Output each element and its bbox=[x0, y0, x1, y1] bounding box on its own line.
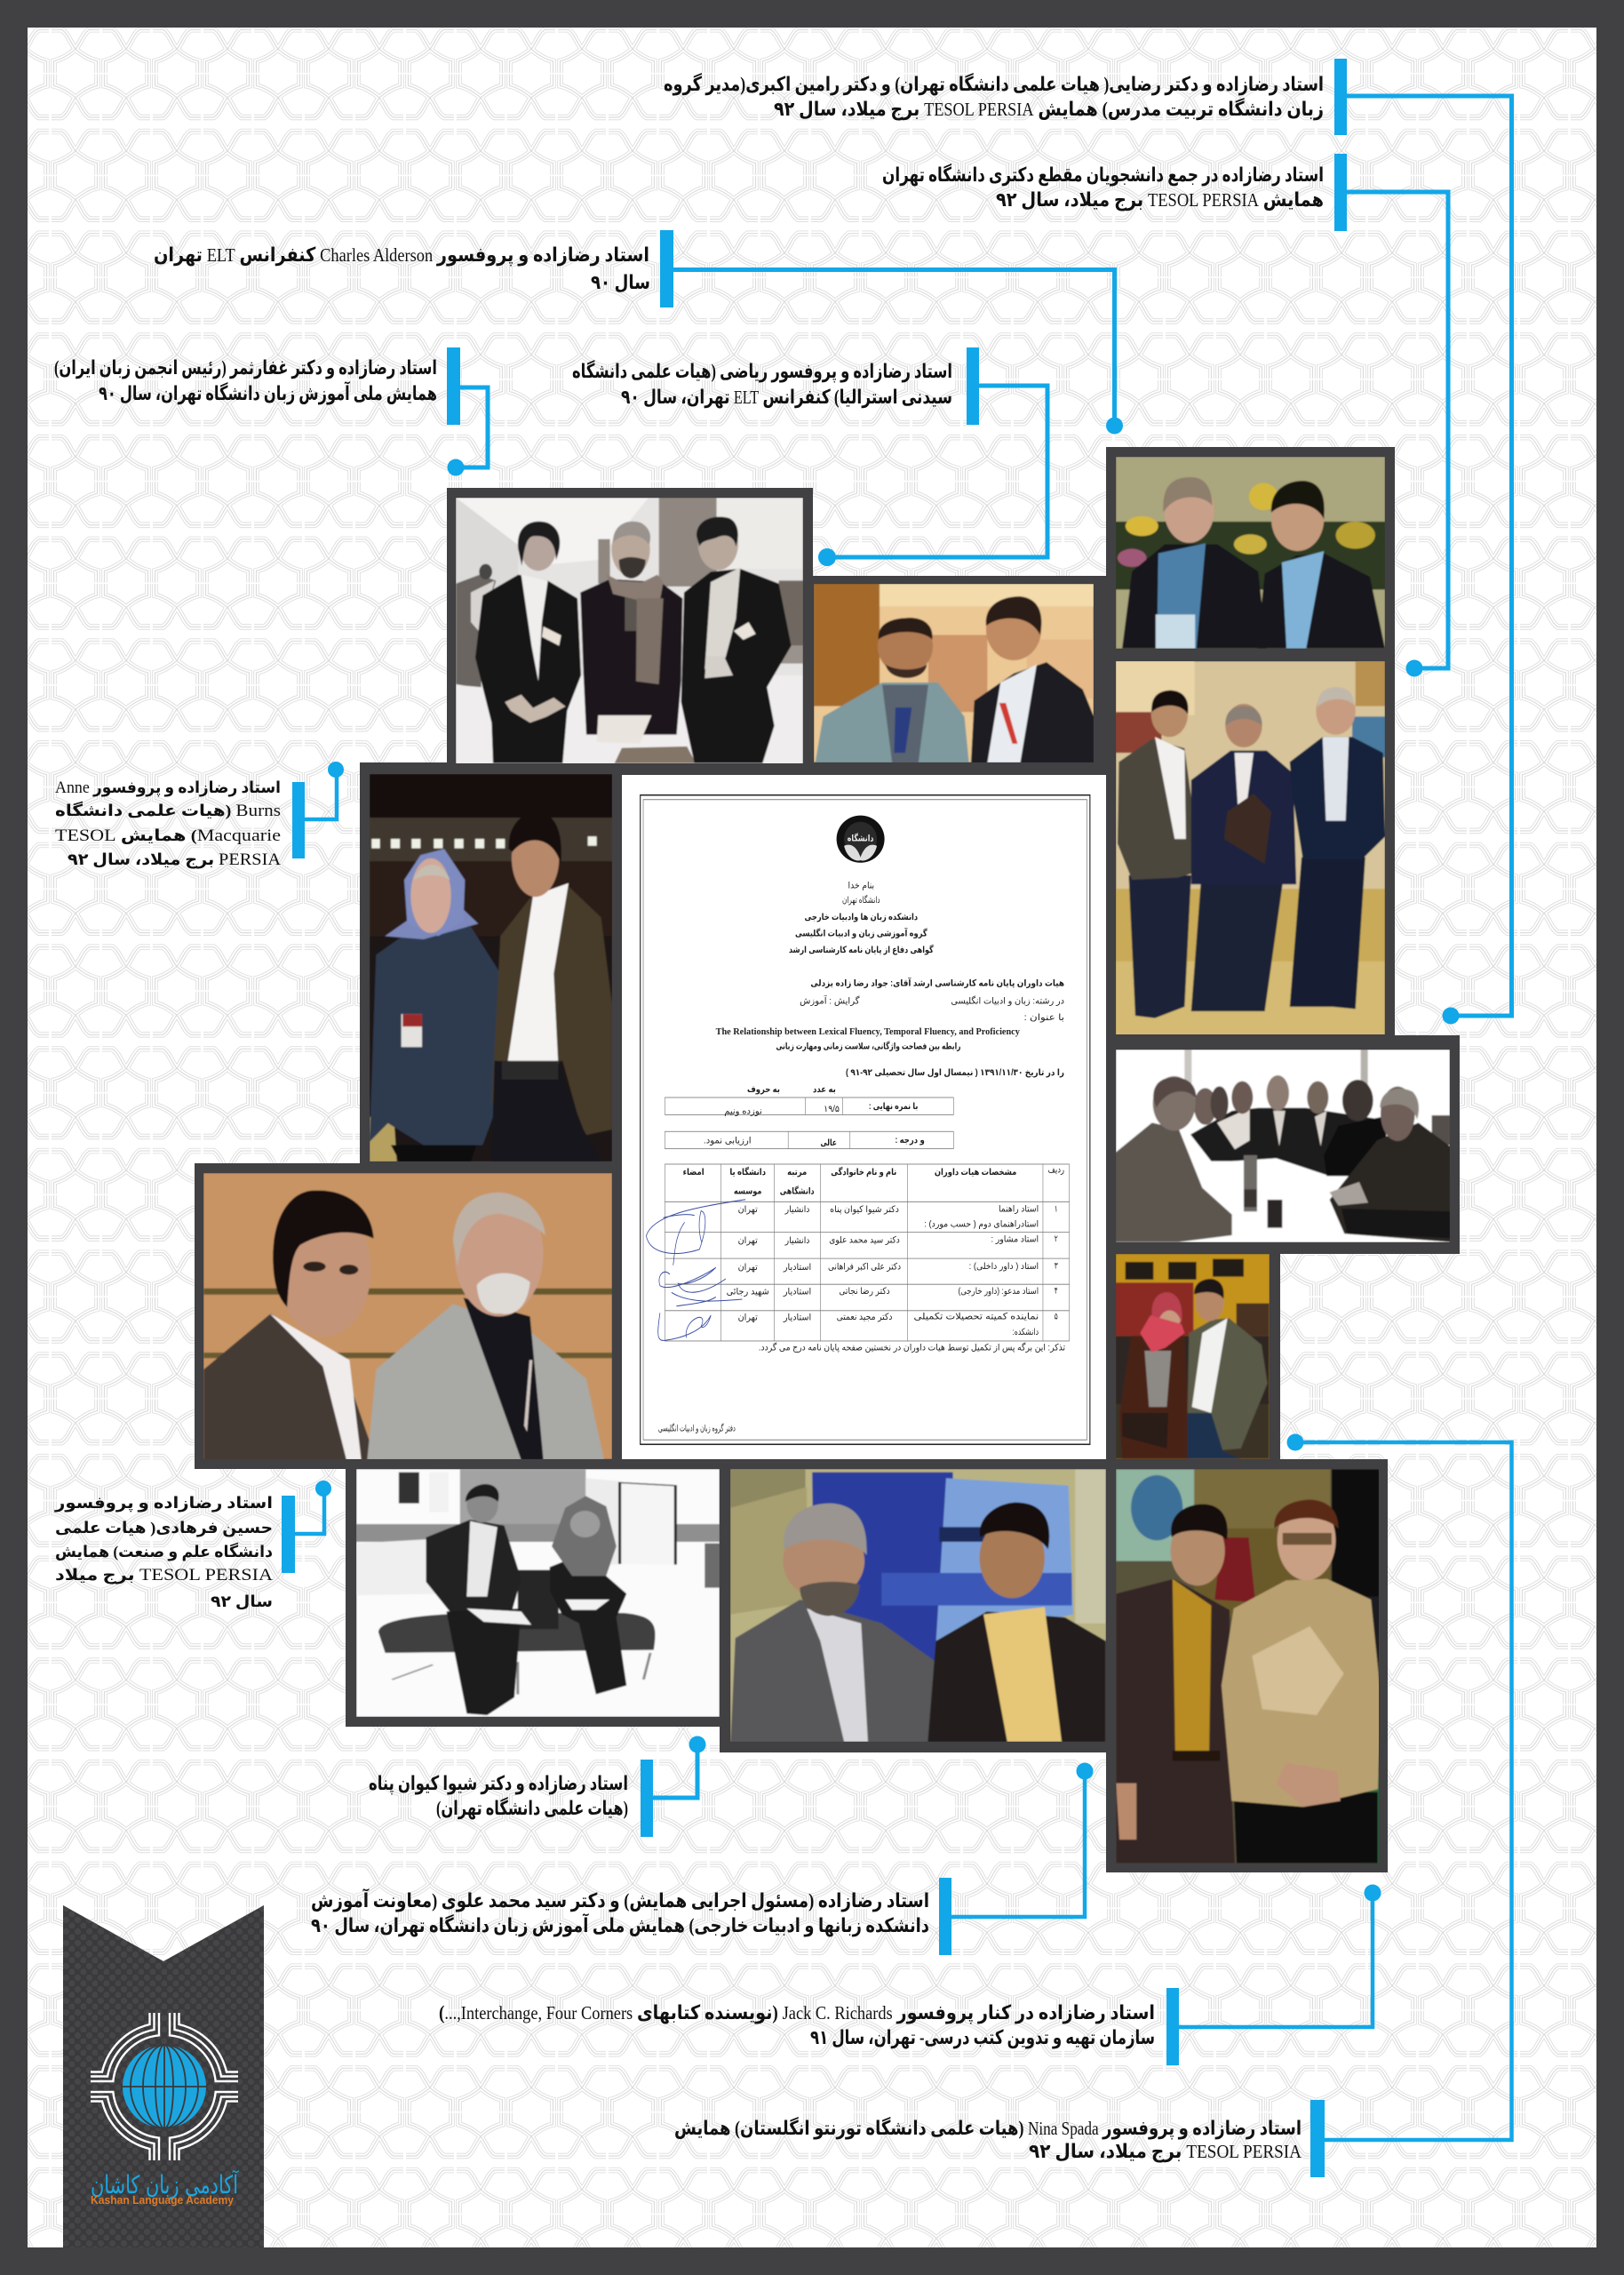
text: حسین فرهادی( هیات علمی bbox=[55, 1519, 273, 1537]
man right bbox=[681, 569, 792, 763]
logo text: Kashan Language Academy bbox=[91, 2194, 234, 2207]
table: committee members: ۴ bbox=[1055, 1285, 1058, 1296]
photo: thesis defence certificate: The Relationship between Lexical Fluency, Temporal Fluency, and Proficiency bbox=[716, 1026, 1020, 1036]
table: committee members: مشخصات هیات داوران bbox=[935, 1167, 1016, 1178]
text bbox=[369, 1772, 628, 1820]
table: committee members: ردیف bbox=[1047, 1165, 1064, 1175]
photo: man and woman with red scarf bbox=[1116, 1254, 1270, 1459]
man left bbox=[1128, 875, 1191, 1018]
callout: Charles Alderson bbox=[154, 230, 1123, 434]
panel: academy logo banner bbox=[63, 1905, 264, 2247]
table: committee members: دانشیار bbox=[784, 1204, 809, 1214]
text bbox=[54, 1494, 273, 1610]
table: committee members: استاد مشاور : bbox=[991, 1234, 1039, 1244]
callout: doctoral students bbox=[882, 154, 1448, 677]
connector arrow bbox=[1347, 96, 1512, 1024]
table: committee members: دکتر مجید نعمتی bbox=[837, 1312, 893, 1321]
bar bbox=[1166, 1988, 1179, 2065]
table: committee members: دکتر سید محمد علوی bbox=[829, 1234, 900, 1245]
connector arrow bbox=[1347, 192, 1448, 677]
photo: panel meeting around table bbox=[1116, 1050, 1450, 1242]
bar bbox=[447, 347, 460, 425]
callout: Ghaffar Samar bbox=[54, 347, 488, 476]
photo: thesis defence certificate: عالی bbox=[820, 1138, 837, 1147]
callout: Riazi bbox=[572, 347, 1047, 566]
table: committee members: مرتبه bbox=[787, 1167, 807, 1178]
photo: man with professor Alderson bbox=[1116, 457, 1385, 649]
text: زبان دانشگاه تربیت مدرس) همایش TESOL PERSIA برج میلاد، سال ۹۲ bbox=[774, 97, 1324, 121]
text bbox=[154, 243, 650, 293]
text: استاد رضازاده (مسئول اجرایی همایش) و دکتر سید محمد علوی (معاونت آموزش bbox=[311, 1888, 929, 1912]
man right bbox=[1234, 1792, 1378, 1864]
photo: man and woman seated, black and white bbox=[356, 1469, 720, 1717]
photo: thesis defence certificate: رابطه بین فصاحت واژگانی، سلاست زمانی ومهارت زبانی bbox=[776, 1040, 960, 1052]
photo: thesis defence certificate: دانشگاه تهران bbox=[842, 895, 880, 905]
bar bbox=[282, 1496, 295, 1573]
bar bbox=[939, 1878, 951, 1955]
icon: university seal bbox=[837, 816, 885, 863]
table: committee members: تهران bbox=[738, 1312, 758, 1322]
table: committee members: تهران bbox=[738, 1204, 758, 1214]
table: committee members: استاد راهنما bbox=[999, 1203, 1039, 1214]
bar bbox=[660, 230, 673, 307]
photo: thesis defence certificate: گواهی دفاع از پایان نامه کارشناسی ارشد bbox=[789, 944, 934, 956]
photo: thesis defence certificate: با نمره نهایی : bbox=[869, 1101, 918, 1113]
table: committee members: دکتر شیوا کیوان پناه bbox=[830, 1204, 899, 1214]
text: استاد رضازاده و پروفسور bbox=[54, 1494, 273, 1513]
photo: thesis defence certificate: نوزده ونیم bbox=[724, 1106, 762, 1117]
table: committee members: ۳ bbox=[1055, 1260, 1058, 1271]
text: سازمان تهیه و تدوین کتب درسی- تهران، سال ۹۱ bbox=[810, 2026, 1155, 2049]
callout: Seyyed Mohammad Alavi bbox=[311, 1763, 1093, 1955]
text: Macquarie) همایش TESOL bbox=[55, 826, 281, 845]
seated woman bbox=[550, 1558, 626, 1695]
text: استاد رضازاده و دکتر شیوا کیوان پناه bbox=[369, 1772, 628, 1795]
photo: thesis defence certificate: را در تاریخ ۱۳۹۱/۱۱/۳۰ ( نیمسال اول سال تحصیلی ۹۲-۹۱ ) bbox=[846, 1067, 1064, 1078]
photo: man with Jack C. Richards bbox=[1116, 1469, 1381, 1864]
bar bbox=[967, 347, 979, 425]
table: committee members: دانشگاهی bbox=[780, 1185, 815, 1196]
table: final grade bbox=[665, 1098, 1070, 1341]
text bbox=[55, 778, 281, 869]
photo: thesis defence certificate: گروه آموزشی زبان و ادبیات انگلیسی bbox=[795, 927, 927, 939]
table: committee members: نام و نام خانوادگی bbox=[831, 1166, 896, 1178]
connector arrow bbox=[305, 762, 344, 819]
table: committee members: استادیار bbox=[783, 1286, 811, 1297]
photo: thesis defence certificate: به حروف bbox=[747, 1084, 780, 1095]
text bbox=[439, 2001, 1155, 2049]
text bbox=[54, 356, 437, 405]
table: committee members: استاد ( داور داخلی) : bbox=[969, 1261, 1039, 1271]
man left bbox=[203, 1313, 376, 1460]
table: committee members: استادیار bbox=[783, 1312, 811, 1322]
text: دانشگاه علم و صنعت) همایش bbox=[55, 1542, 273, 1561]
table: committee members: نماینده کمیته تحصیلات تکمیلی bbox=[914, 1311, 1039, 1321]
text: همایش TESOL PERSIA برج میلاد، سال ۹۲ bbox=[996, 188, 1324, 212]
icon: globe emblem bbox=[91, 2013, 238, 2160]
photo: thesis defence certificate bbox=[622, 775, 1106, 1459]
photo: thesis defence certificate: به عدد bbox=[813, 1084, 836, 1094]
photo: thesis defence certificate: دانشکده زبان ها وادبیات خارجی bbox=[805, 912, 919, 922]
panel: photo collage frame bbox=[195, 447, 1460, 1872]
photo: thesis defence certificate: و درجه : bbox=[895, 1135, 925, 1145]
text bbox=[572, 359, 952, 409]
man right bbox=[367, 1304, 604, 1460]
connector arrow bbox=[951, 1763, 1093, 1917]
table: committee members: موسسه bbox=[734, 1186, 761, 1197]
table: committee members: شهید رجائی bbox=[727, 1286, 769, 1297]
text: استاد رضازاده و پروفسور Anne bbox=[55, 778, 281, 797]
text: استاد رضازاده در جمع دانشجویان مقطع دکتری دانشگاه تهران bbox=[882, 163, 1324, 187]
text: (هیات علمی دانشگاه تهران) bbox=[436, 1796, 628, 1820]
connector arrow bbox=[673, 270, 1123, 434]
text bbox=[882, 163, 1324, 212]
man right bbox=[927, 1611, 1106, 1742]
table: committee members: دکتر رضا نجاتی bbox=[839, 1286, 890, 1296]
text: سال ۹۲ bbox=[211, 1592, 273, 1610]
photo: thesis defence certificate: دفتر گروه زبان و ادبیات انگلیسی bbox=[658, 1423, 736, 1433]
table: committee members: تهران bbox=[738, 1235, 758, 1245]
callout: Anne Burns bbox=[55, 762, 344, 869]
seated man bbox=[426, 1520, 521, 1615]
text: PERSIA برج میلاد، سال ۹۲ bbox=[68, 850, 281, 869]
text: استاد رضازاده و دکتر رضایی( هیات علمی دانشگاه تهران) و دکتر رامین اکبری(مدیر گروه bbox=[664, 72, 1324, 96]
text: سال ۹۰ bbox=[591, 271, 650, 293]
photo: thesis defence certificate: با عنوان : bbox=[1023, 1012, 1064, 1022]
table: committee members: دانشیار bbox=[784, 1235, 809, 1245]
logo text: آکادمی زبان کاشان bbox=[91, 2170, 239, 2199]
callout: Jack C. Richards bbox=[439, 1884, 1381, 2065]
table: committee members: ۱ bbox=[1055, 1203, 1058, 1214]
photo: three men standing bbox=[1116, 661, 1385, 1036]
table: committee members: استادراهنمای دوم ( حسب مورد) : bbox=[924, 1218, 1039, 1229]
callout: Shiva Keivanpanah bbox=[369, 1736, 705, 1837]
table: committee members: ۵ bbox=[1055, 1311, 1058, 1321]
bar bbox=[1334, 59, 1347, 135]
text: استاد رضازاده و پروفسور ریاضی (هیات علمی دانشگاه bbox=[572, 359, 952, 383]
photo: thesis defence certificate: گرایش : آموزش bbox=[800, 994, 860, 1006]
table: committee members: استادیار bbox=[783, 1262, 811, 1272]
text bbox=[674, 2116, 1302, 2163]
photo: thesis defence certificate: در رشته: زبان و ادبیات انگلیسی bbox=[951, 995, 1064, 1006]
text: TESOL PERSIA برج میلاد bbox=[55, 1566, 273, 1585]
photo: thesis defence certificate: تذکر: این برگه پس از تکمیل توسط هیات داوران در نخستین صفحه پایان نامه درج می گردد. bbox=[759, 1343, 1066, 1353]
table: committee members: دکتر علی اکبر فراهانی bbox=[828, 1261, 901, 1272]
man left bbox=[1116, 1579, 1235, 1864]
connector arrow bbox=[653, 1736, 705, 1798]
signatures bbox=[646, 1200, 745, 1340]
photo: man with professor Anne Burns bbox=[370, 774, 612, 1161]
text: استاد رضازاده در کنار پروفسور Jack C. Richards (نویسنده کتابهای Interchange, Four Corners,...) bbox=[439, 2001, 1155, 2024]
connector arrow bbox=[1179, 1884, 1381, 2027]
man right bbox=[1290, 857, 1365, 1009]
table: committee members: امضاء bbox=[683, 1167, 705, 1177]
table: committee members: دانشگاه یا bbox=[729, 1166, 766, 1177]
callout: Rezaei and Akbari bbox=[664, 59, 1512, 1024]
table: committee members bbox=[683, 1165, 1064, 1337]
text: سیدنی استرالیا) کنفرانس ELT تهران، سال ۹۰ bbox=[621, 386, 952, 409]
bar bbox=[1334, 154, 1347, 231]
man middle bbox=[580, 579, 682, 735]
text bbox=[664, 72, 1324, 121]
photo: three men black and white bbox=[456, 498, 803, 764]
connector arrow bbox=[1286, 1434, 1512, 2140]
man left bbox=[475, 575, 581, 763]
photo: thesis defence certificate: ۱۹/۵ bbox=[824, 1104, 840, 1114]
logo text bbox=[91, 2170, 239, 2207]
icon: university seal: دانشگاه bbox=[848, 832, 874, 843]
bar bbox=[641, 1760, 653, 1837]
table: committee members: دانشکده: bbox=[1013, 1327, 1039, 1337]
callout: Farhady bbox=[54, 1481, 331, 1610]
table: committee members: تهران bbox=[738, 1262, 758, 1272]
text: TESOL PERSIA برج میلاد، سال ۹۲ bbox=[1029, 2140, 1302, 2163]
photo: two men in shop bbox=[814, 584, 1094, 762]
connector arrow bbox=[818, 386, 1047, 566]
connector arrow bbox=[295, 1481, 331, 1534]
photo: man with professor Farhady bbox=[203, 1173, 612, 1460]
text: دانشکده زبانها و ادبیات خارجی) همایش ملی آموزش زبان دانشگاه تهران، سال ۹۰ bbox=[311, 1912, 929, 1937]
table: committee members: ۲ bbox=[1055, 1233, 1058, 1244]
man middle bbox=[1191, 880, 1283, 1011]
photo: two men before blue banner bbox=[730, 1469, 1106, 1742]
text: استاد رضازاده و دکتر غفارثمر (رئیس انجمن زبان ایران) bbox=[54, 356, 437, 379]
photo: thesis defence certificate: هیات داوران پایان نامه کارشناسی ارشد آقای: جواد رضا زاده یزدلی bbox=[810, 977, 1064, 989]
callout: Nina Spada bbox=[674, 1434, 1512, 2177]
text: استاد رضازاده و پروفسور Charles Alderson کنفرانس ELT تهران bbox=[154, 243, 649, 267]
text bbox=[311, 1888, 929, 1937]
photo: thesis defence certificate: بنام خدا bbox=[848, 880, 874, 890]
connector arrow bbox=[448, 387, 488, 476]
text: Burns (هیات علمی دانشگاه bbox=[55, 801, 281, 820]
bar bbox=[292, 782, 305, 858]
table: committee members: استاد مدعو: (داور خارجی) bbox=[958, 1286, 1039, 1296]
man left bbox=[730, 1600, 953, 1742]
bar bbox=[1310, 2100, 1325, 2177]
text: استاد رضازاده و پروفسور Nina Spada (هیات علمی دانشگاه تورنتو انگلستان) همایش bbox=[674, 2116, 1302, 2140]
photo: thesis defence certificate: ارزیابی نمود. bbox=[704, 1135, 752, 1145]
text: همایش ملی آموزش زبان دانشگاه تهران، سال ۹۰ bbox=[99, 380, 437, 405]
